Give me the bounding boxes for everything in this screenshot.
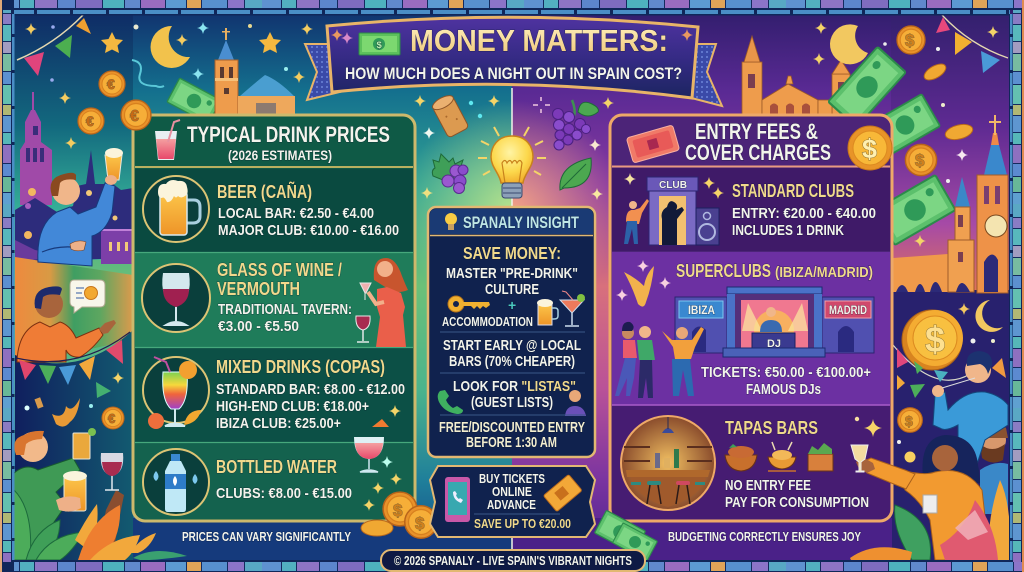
tip: guest lists: (GUEST LISTS) — [471, 394, 553, 411]
online line: ONLINE — [492, 484, 532, 499]
illustration: superclub stage: MADRID — [829, 303, 867, 317]
tip: cheaper bars: BARS (70% CHEAPER) — [449, 353, 575, 370]
banner title: MONEY MATTERS: — [410, 23, 668, 58]
icon: club entrance — [624, 173, 724, 245]
person: man in orange talking — [17, 286, 116, 362]
big dollar coin right: $ — [925, 319, 945, 360]
bunting top right — [936, 15, 1008, 73]
save up to price: SAVE UP TO €20.00 — [474, 516, 571, 531]
label: beer: BEER (CAÑA) — [217, 181, 312, 202]
person: man raising beer — [38, 148, 123, 266]
background: teal left half — [0, 0, 512, 572]
tip: free entry: FREE/DISCOUNTED ENTRY — [439, 420, 585, 436]
euro coins top left — [78, 71, 125, 134]
icon: grapes left — [432, 154, 468, 194]
gold coin stack near left panel — [361, 492, 437, 538]
euro coin over panel corner: € — [130, 108, 139, 125]
icon: star burst — [616, 260, 671, 307]
ribbon tail right — [676, 44, 722, 106]
row: beer background — [135, 169, 413, 252]
tip: look for listas: LOOK FOR "LISTAS" — [453, 378, 576, 395]
center divider — [511, 88, 513, 550]
icon: banknote: $ — [376, 40, 382, 51]
row: mixed drinks background — [135, 348, 413, 442]
plus sign: + — [508, 297, 516, 313]
bills top right — [828, 47, 956, 245]
moon and coin lower right — [897, 300, 1003, 462]
stars and crescent top left — [25, 22, 313, 149]
lower-right dark night area — [891, 290, 1011, 562]
wine tavern price: €3.00 - €5.50 — [218, 318, 299, 335]
footer pill — [381, 550, 645, 571]
mixed drinks high-end club price: HIGH-END CLUB: €18.00+ — [216, 398, 369, 415]
glow behind the light bulb, left side — [402, 100, 512, 320]
woman's arm and glass over the panel — [851, 445, 915, 489]
icon: wine cork — [430, 93, 469, 138]
euro coin and leaf lower left: € — [108, 411, 115, 426]
tapas no entry fee: NO ENTRY FEE — [725, 477, 811, 494]
icon: grapes right — [552, 100, 598, 150]
label: vermouth: VERMOUTH — [217, 279, 300, 299]
icon: cocktail tumbler — [155, 120, 180, 160]
label: bottled water: BOTTLED WATER — [216, 457, 337, 477]
bill behind the left panel — [167, 78, 221, 124]
tapas pay for consumption: PAY FOR CONSUMPTION — [725, 494, 869, 511]
left skyline — [15, 92, 133, 264]
mixed drinks ibiza club price: IBIZA CLUB: €25.00+ — [216, 415, 341, 432]
title banner — [327, 17, 698, 98]
row: tapas background — [612, 406, 890, 519]
moon and coin lower right: $ — [905, 413, 913, 429]
footer text: © 2026 SPANALY - LIVE SPAIN'S VIBRANT NIGHTS — [394, 554, 632, 568]
euro coin over panel corner — [121, 100, 151, 130]
row: wine background — [135, 253, 413, 347]
label: tapas bars: TAPAS BARS — [725, 418, 818, 438]
right cathedral — [742, 36, 850, 114]
heading: entry fees: ENTRY FEES & — [695, 119, 818, 144]
sparkle in tapas row — [855, 417, 882, 437]
bunting lower right — [893, 345, 1006, 398]
beer major club price: MAJOR CLUB: €10.00 - €16.00 — [218, 222, 399, 239]
note: prices can vary: PRICES CAN VARY SIGNIFICANTLY — [182, 530, 352, 544]
icon: banknote — [359, 33, 400, 55]
advance line: ADVANCE — [487, 497, 536, 512]
person: bearded man right — [980, 423, 1008, 514]
row: standard clubs background — [612, 168, 890, 251]
standard clubs includes drink: INCLUDES 1 DRINK — [732, 222, 844, 239]
icon: mixed drink — [143, 357, 209, 429]
icon: smartphone — [445, 477, 470, 522]
tip: start early: START EARLY @ LOCAL — [443, 337, 581, 354]
tip: culture: CULTURE — [485, 281, 539, 298]
lower band right — [512, 518, 892, 562]
beer local bar price: LOCAL BAR: €2.50 - €4.00 — [218, 205, 374, 222]
insight header strip — [430, 209, 593, 234]
tip: master pre-drink: MASTER "PRE-DRINK" — [446, 265, 578, 282]
person: man in green with drinks — [12, 428, 124, 560]
euro coins top left: € — [107, 76, 115, 92]
illustration: superclub stage — [675, 287, 874, 357]
heading: save money: SAVE MONEY: — [463, 243, 561, 263]
bunting mid left — [16, 332, 130, 398]
euro coin and leaf lower left — [24, 372, 124, 429]
superclubs famous djs: FAMOUS DJs — [746, 381, 821, 398]
right churches — [893, 115, 1008, 293]
mixed drinks standard bar price: STANDARD BAR: €8.00 - €12.00 — [216, 381, 405, 398]
icon: small bulb — [445, 213, 457, 230]
illustration: superclub stage: DJ — [767, 338, 781, 350]
row: water background — [135, 443, 413, 519]
icon: guest — [565, 390, 586, 416]
label: superclubs: SUPERCLUBS — [676, 261, 771, 281]
lower bands below the panels — [133, 518, 512, 562]
center decorations — [414, 95, 614, 200]
heading: cover charges: COVER CHARGES — [685, 140, 831, 165]
lower-left ground band — [15, 257, 133, 365]
label: glass of wine: GLASS OF WINE / — [217, 260, 342, 280]
icon: beer mug — [143, 176, 209, 242]
illustration: tapas bar interior — [621, 416, 715, 510]
label: standard clubs: STANDARD CLUBS — [732, 181, 854, 201]
big dollar coin right — [902, 310, 963, 370]
panel: spanaly insight — [428, 207, 595, 457]
moon and coins top right: $ — [905, 31, 915, 50]
heading: spanaly insight: SPANALY INSIGHT — [463, 213, 579, 232]
moon and coins top right — [813, 22, 999, 247]
standard clubs entry price: ENTRY: €20.00 - €40.00 — [732, 205, 876, 222]
left night sky — [14, 14, 133, 260]
icon: club entrance: CLUB — [659, 180, 687, 191]
leaves lower left — [14, 490, 187, 560]
decorative left ribbon squiggle — [132, 60, 164, 87]
speech bubble with coin — [70, 280, 105, 313]
icon: key — [448, 296, 490, 312]
icon: wine glass — [142, 264, 210, 332]
subheading: 2026 estimates: (2026 ESTIMATES) — [228, 148, 332, 163]
gold coin stack near left panel: $ — [415, 514, 425, 533]
superclubs ticket price: TICKETS: €50.00 - €100.00+ — [701, 364, 871, 381]
right evening sky — [891, 14, 1011, 294]
panel: typical drink prices — [133, 115, 415, 521]
tip: before 1:30 am: BEFORE 1:30 AM — [466, 434, 557, 451]
icon: green leaf — [560, 158, 591, 190]
illustration: three dancing people — [615, 322, 704, 398]
tip: accommodation: ACCOMMODATION — [442, 315, 533, 329]
label: mixed drinks: MIXED DRINKS (COPAS) — [216, 357, 385, 377]
leaves lower right — [850, 480, 1010, 562]
bunting top left — [17, 15, 91, 76]
icon: phone handset — [438, 390, 463, 414]
icon: ticket — [626, 125, 680, 163]
icon: gold ticket — [543, 474, 582, 512]
icon: water bottle — [143, 449, 209, 515]
person: woman in orange right — [900, 435, 990, 560]
domed building top left — [238, 75, 295, 115]
person: man in blue right — [932, 351, 1008, 470]
wine tavern label: TRADITIONAL TAVERN: — [218, 301, 352, 318]
person: woman in red dress — [356, 258, 408, 347]
euro coins top left: € — [86, 113, 94, 129]
icon: cocktail and sparkles — [354, 405, 402, 511]
note: budgeting: BUDGETING CORRECTLY ENSURES JOY — [668, 530, 862, 544]
bills bottom center — [595, 510, 657, 561]
label: ibiza and madrid: (IBIZA/MADRID) — [775, 264, 873, 281]
bottled water price: CLUBS: €8.00 - €15.00 — [216, 485, 352, 502]
icon: tapas dishes — [725, 442, 833, 471]
panel: entry fees and cover charges — [610, 115, 892, 521]
icon: dollar coin: $ — [862, 134, 877, 164]
ribbon tail left — [305, 44, 348, 100]
bell tower top left — [215, 28, 238, 115]
gold coin stack near left panel: $ — [393, 501, 403, 520]
background: purple right half — [512, 0, 1024, 572]
banner subtitle: HOW MUCH DOES A NIGHT OUT IN SPAIN COST? — [345, 65, 682, 83]
icon: light bulb — [478, 127, 546, 198]
illustration: superclub stage: IBIZA — [688, 303, 715, 317]
row: superclubs background — [612, 252, 890, 405]
icon: beer mug and cocktail — [537, 291, 585, 326]
glow behind the light bulb, right side — [512, 100, 622, 320]
lower-left night band — [15, 330, 133, 560]
callout: buy tickets online — [430, 466, 595, 537]
buy tickets line: BUY TICKETS — [479, 471, 545, 486]
heading: typical drink prices: TYPICAL DRINK PRICES — [187, 122, 390, 147]
bills top right: $ — [915, 151, 925, 170]
sparkles on banner — [331, 29, 693, 44]
icon: dollar coin — [848, 126, 892, 170]
